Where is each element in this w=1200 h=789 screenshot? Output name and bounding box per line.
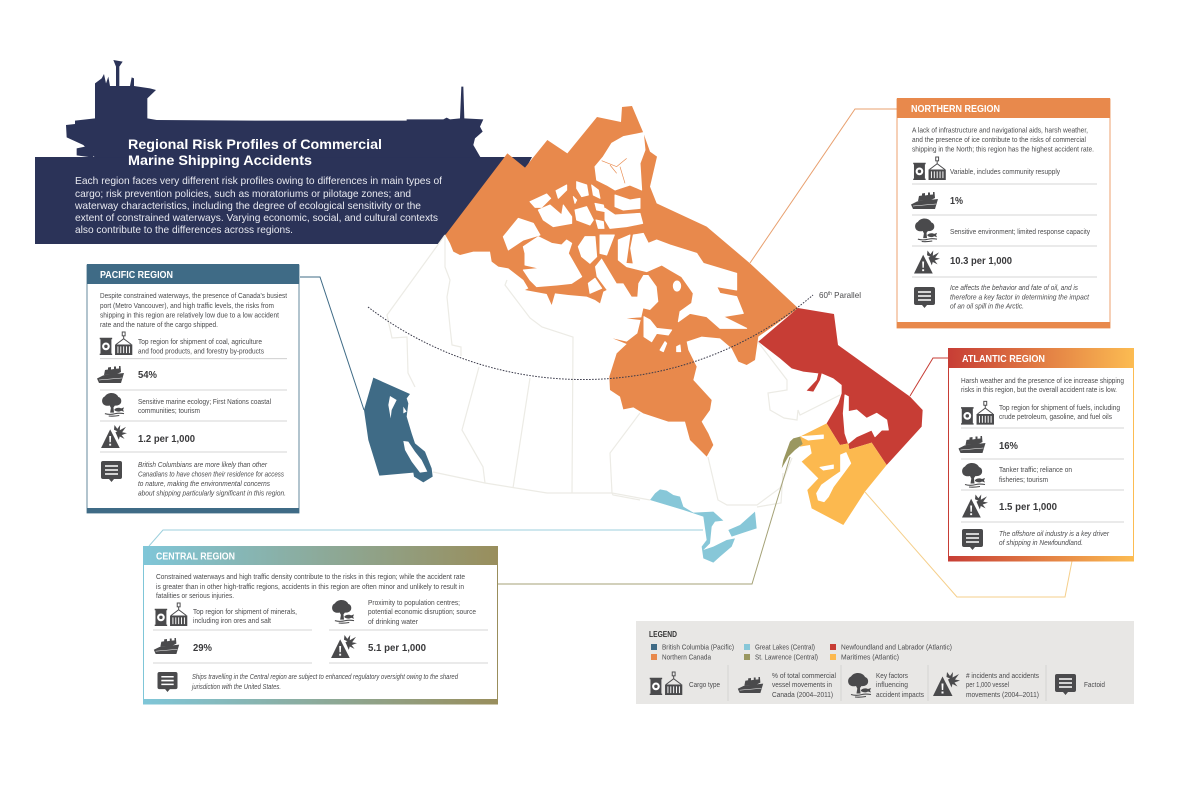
Northern description: and the presence of ice contribute to the risks of commercial xyxy=(912,135,1086,144)
Atlantic factoid xyxy=(999,529,1109,547)
Pacific description xyxy=(100,291,288,329)
Northern share: 1% xyxy=(950,195,964,207)
legend panel xyxy=(636,621,1134,704)
legend label: factoid: Factoid xyxy=(1084,680,1105,689)
icon: tree xyxy=(962,463,985,487)
legend: British Columbia: British Columbia (Pacific) xyxy=(662,642,734,652)
panel: Central region xyxy=(143,546,498,704)
legend label: key factors xyxy=(876,671,924,699)
Pacific factoid xyxy=(138,460,286,497)
icon: ship xyxy=(911,192,938,209)
Pacific key factors: Sensitive marine ecology; First Nations coastal xyxy=(138,397,271,406)
Atlantic cargo text xyxy=(999,403,1120,421)
leader line: Northern xyxy=(750,109,897,263)
Pacific description: shipping in this region are relatively low due to a low accident xyxy=(100,310,280,320)
intro text block xyxy=(74,176,442,236)
icon: cargo xyxy=(100,332,132,355)
Central header xyxy=(143,546,498,565)
Central factoid: jurisdiction with the United States. xyxy=(191,682,281,691)
Pacific footer bar xyxy=(87,508,299,513)
intro text block: cargo; risk prevention policies, such as moratoriums or pilotage zones; and xyxy=(75,189,411,200)
Pacific cargo text xyxy=(138,337,264,356)
Central description xyxy=(156,572,465,600)
Central accident rate: 5.1 per 1,000 xyxy=(368,642,426,654)
legend: Newfoundland and Labrador: Newfoundland and Labrador (Atlantic) xyxy=(841,642,952,652)
Atlantic key factors: fisheries; tourism xyxy=(999,475,1048,484)
Northern factoid: of an oil spill in the Arctic. xyxy=(950,302,1024,311)
Pacific accident rate: 1.2 per 1,000 xyxy=(138,433,195,445)
Pacific heading: PACIFIC REGION xyxy=(100,269,173,281)
Atlantic key factors xyxy=(999,465,1072,484)
Pacific description: Despite constrained waterways, the presence of Canada’s busiest xyxy=(100,291,288,300)
legend label: incidents: # incidents and accidents xyxy=(966,671,1039,680)
icon: ship xyxy=(958,436,986,453)
Atlantic footer bar xyxy=(948,556,1134,561)
legend label: vessel movements xyxy=(772,671,836,699)
panel: Pacific region xyxy=(87,264,299,513)
Central footer bar xyxy=(143,699,498,704)
icon: cargo xyxy=(913,157,946,180)
Atlantic cargo text: Top region for shipment of fuels, including xyxy=(999,403,1120,412)
legend: St. Lawrence: St. Lawrence (Central) xyxy=(755,652,818,662)
icon: warning xyxy=(101,425,127,448)
Pacific description: port (Metro Vancouver), and high traffic levels, the risks from xyxy=(100,301,274,310)
60th parallel dotted line xyxy=(368,295,813,380)
Central cargo text: including iron ores and salt xyxy=(193,616,272,625)
60th parallel label: 60 xyxy=(819,290,828,300)
leader line: Maritimes xyxy=(865,492,1072,597)
title: Marine Shipping Accidents xyxy=(128,153,312,168)
map: British Columbia region xyxy=(364,378,433,482)
icon: cargo xyxy=(155,603,187,626)
icon: factoid xyxy=(914,287,935,308)
Pacific cargo text: and food products, and forestry by-products xyxy=(138,347,264,356)
legend label: vessel movements: Canada (2004–2011) xyxy=(772,690,833,699)
icon: factoid xyxy=(158,672,178,692)
Northern accident rate: 10.3 per 1,000 xyxy=(950,255,1012,267)
Northern header xyxy=(897,98,1110,118)
map: Maritimes region xyxy=(800,423,887,525)
legend icon: factoid xyxy=(1055,674,1076,695)
Atlantic factoid: The offshore oil industry is a key driver xyxy=(999,529,1109,538)
Atlantic description xyxy=(961,376,1124,394)
legend heading: LEGEND xyxy=(649,629,677,639)
map: Great Lakes region xyxy=(650,489,757,563)
intro text block: extent of constrained waterways. Varying economic, social, and cultural contexts xyxy=(75,213,438,224)
icon: ship xyxy=(154,638,179,654)
Atlantic key factors: Tanker traffic; reliance on xyxy=(999,465,1072,474)
icon: warning xyxy=(914,250,940,274)
map: provincial boundaries xyxy=(387,235,840,507)
Pacific description: rate and the nature of the cargo shipped. xyxy=(100,320,218,329)
Central cargo text: Top region for shipment of minerals, xyxy=(193,607,297,616)
Northern key factors: Sensitive environment; limited response capacity xyxy=(950,227,1090,236)
icon: cargo xyxy=(961,401,994,425)
intro text block: Each region faces very different risk profiles owing to differences in main types of xyxy=(75,176,442,187)
Pacific factoid: to nature, making the environmental concerns xyxy=(138,479,270,488)
Northern factoid: therefore a key factor in determining the impact xyxy=(950,292,1090,301)
60th parallel label: Parallel xyxy=(832,290,861,300)
leader line: Pacific xyxy=(300,277,364,410)
leader line: Great Lakes xyxy=(149,530,703,546)
leader line: St. Lawrence xyxy=(498,457,790,584)
60th parallel label: th xyxy=(828,291,832,297)
Pacific share: 54% xyxy=(138,369,158,381)
map: Northern Canada region xyxy=(445,106,798,457)
legend: Great Lakes: Great Lakes (Central) xyxy=(755,642,815,652)
Northern description: A lack of infrastructure and navigational aids, harsh weather, xyxy=(912,126,1088,135)
intro text block: also contribute to the differences across regions. xyxy=(75,225,293,236)
legend label: vessel movements: % of total commercial xyxy=(772,671,836,680)
icon: ship silhouette xyxy=(66,60,483,158)
Central share: 29% xyxy=(193,642,213,654)
Atlantic header xyxy=(948,348,1134,368)
icon: factoid xyxy=(101,461,122,482)
panel: Northern region xyxy=(897,98,1110,328)
Northern description xyxy=(912,126,1094,153)
Central factoid: Ships travelling in the Central region are subject to enhanced regulatory oversight owing to the shared xyxy=(192,672,459,681)
Northern footer bar xyxy=(897,322,1110,328)
Northern factoid: Ice affects the behavior and fate of oil, and is xyxy=(950,283,1078,292)
Atlantic cargo text: crude petroleum, gasoline, and fuel oils xyxy=(999,412,1112,421)
Atlantic factoid: of shipping in Newfoundland. xyxy=(999,538,1083,547)
legend icon: warning xyxy=(933,672,960,696)
Northern heading: NORTHERN REGION xyxy=(911,103,1000,115)
legend icon: cargo xyxy=(650,672,682,695)
icon: ship xyxy=(97,366,124,383)
Central description: Constrained waterways and high traffic density contribute to the risks in this region; while the accident rate xyxy=(156,572,465,581)
legend: Northern Canada: Northern Canada xyxy=(662,652,712,662)
Central key factors: of drinking water xyxy=(368,617,418,626)
icon: warning xyxy=(962,494,988,518)
legend: Maritimes: Maritimes (Atlantic) xyxy=(841,652,899,662)
icon: tree xyxy=(332,600,354,623)
Northern description: shipping in the North; this region has the highest accident rate. xyxy=(912,144,1094,153)
title banner: navy band xyxy=(35,157,532,244)
Atlantic description: Harsh weather and the presence of ice increase shipping xyxy=(961,376,1124,385)
legend label: incidents: per 1,000 vessel xyxy=(966,680,1009,689)
Pacific factoid: about shipping particularly significant in this region. xyxy=(138,488,286,497)
icon: factoid xyxy=(962,529,983,550)
Central heading: CENTRAL REGION xyxy=(156,550,235,562)
Northern cargo text: Variable, includes community resupply xyxy=(950,167,1060,176)
map: St. Lawrence region xyxy=(782,437,803,468)
panel: Atlantic region xyxy=(948,348,1134,561)
Atlantic share: 16% xyxy=(999,440,1019,452)
legend label: key factors: Key factors xyxy=(876,671,908,680)
Pacific key factors: communities; tourism xyxy=(138,406,200,415)
Central factoid xyxy=(191,672,459,691)
legend label: key factors: accident impacts xyxy=(876,690,924,699)
legend icon: tree xyxy=(848,673,871,697)
Pacific factoid: British Columbians are more likely than other xyxy=(138,460,267,469)
icon: tree xyxy=(915,219,937,242)
Pacific key factors xyxy=(138,397,271,415)
Pacific factoid: Canadians to have chosen their residence for access xyxy=(138,470,284,479)
title: Regional Risk Profiles of Commercial xyxy=(128,137,382,152)
Pacific cargo text: Top region for shipment of coal, agriculture xyxy=(138,337,262,346)
legend label: incidents xyxy=(966,671,1039,699)
Northern factoid xyxy=(950,283,1090,311)
legend label: key factors: influencing xyxy=(876,680,908,689)
Central key factors: Proximity to population centres; xyxy=(368,598,460,607)
Atlantic accident rate: 1.5 per 1,000 xyxy=(999,501,1057,513)
intro text block: waterway characteristics, including the degree of ecological sensitivity or the xyxy=(74,201,421,212)
legend label: vessel movements: vessel movements in xyxy=(772,680,832,689)
icon: tree xyxy=(102,393,124,416)
Central cargo text xyxy=(193,607,297,625)
Atlantic description: risks in this region, but the overall accident rate is low. xyxy=(961,385,1117,394)
title xyxy=(128,137,382,168)
map: Newfoundland and Labrador region xyxy=(758,308,923,465)
legend icon: ship xyxy=(738,677,763,693)
Central key factors: potential economic disruption; source xyxy=(368,607,476,616)
legend label: incidents: movements (2004–2011) xyxy=(966,690,1039,699)
Central description: is greater than in other high-traffic regions, accidents in this region are often minor and unlikely to result in xyxy=(156,582,464,591)
Central description: fatalities or serious injuries. xyxy=(156,591,234,600)
Pacific header xyxy=(87,264,299,284)
legend label: cargo type: Cargo type xyxy=(689,680,720,689)
Atlantic heading: ATLANTIC REGION xyxy=(962,353,1045,365)
leader line: Atlantic red xyxy=(910,358,948,396)
Central key factors xyxy=(368,598,476,626)
icon: warning xyxy=(331,635,357,658)
